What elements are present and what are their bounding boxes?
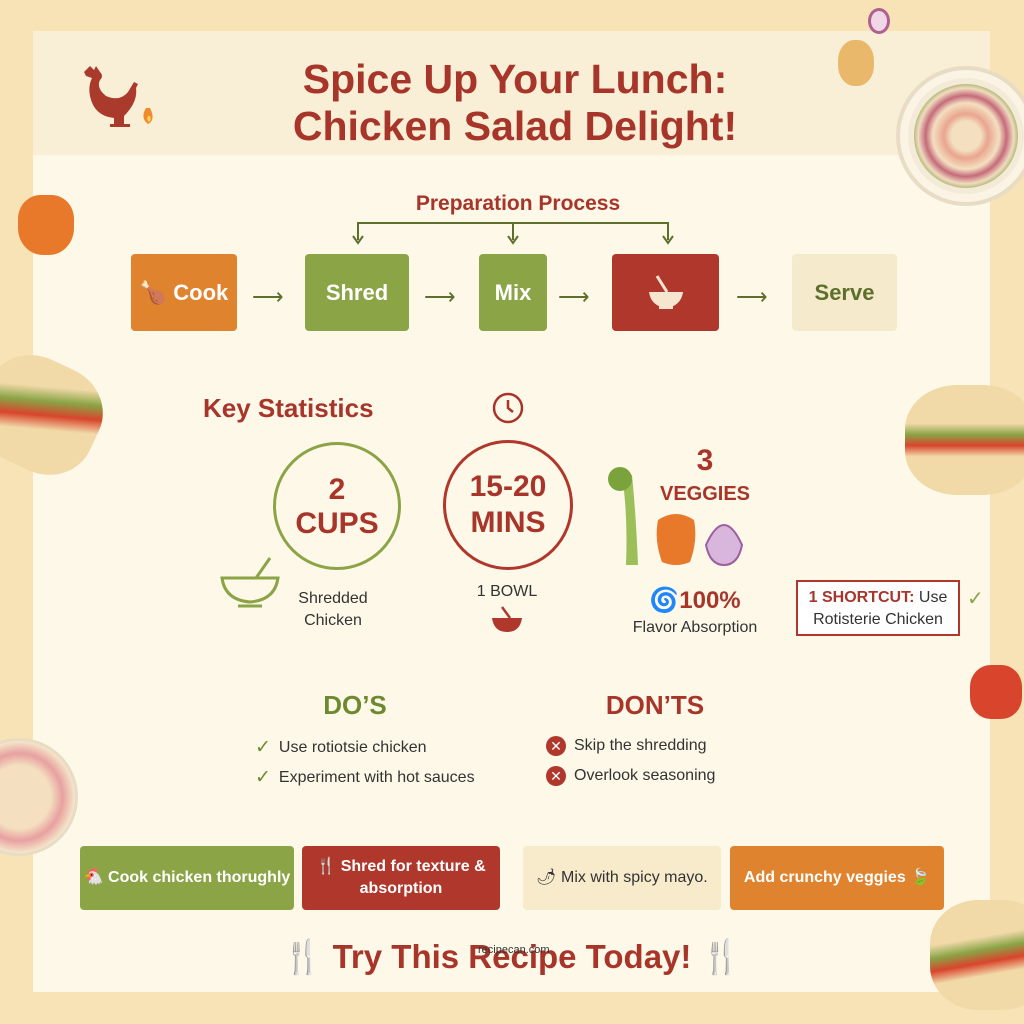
stat: 15-20 mins: 15-20 xyxy=(470,470,546,503)
step: serve: Serve xyxy=(815,280,874,304)
stat: 3 veggies xyxy=(660,444,750,505)
callout: shortcut: Rotisterie Chicken xyxy=(813,611,943,628)
arrow: ⟶ xyxy=(424,284,456,309)
card: shred: 🍴 Shred for texture & xyxy=(316,858,486,875)
label: shredded chicken: Chicken xyxy=(304,612,362,629)
list: do's: ✓ xyxy=(255,767,271,788)
icon: green bowl xyxy=(220,557,280,608)
label: 1 bowl: 1 BOWL xyxy=(477,583,537,600)
arrow: ⟶ xyxy=(736,284,768,309)
stat: 2 cups xyxy=(273,442,401,570)
bracket arrows xyxy=(352,222,674,245)
title xyxy=(293,56,737,149)
card: shred xyxy=(302,846,500,910)
stat: 100% flavor absorption xyxy=(633,586,757,636)
icon: check: ✓ xyxy=(967,588,984,610)
decoration: sandwich left xyxy=(0,340,118,490)
title: Chicken Salad Delight! xyxy=(293,103,737,149)
card: veggies: Add crunchy veggies 🍃 xyxy=(744,869,930,886)
icon: veggies xyxy=(608,467,743,566)
list: do's: Experiment with hot sauces xyxy=(279,768,475,786)
stat: 2 cups: CUPS xyxy=(295,507,379,540)
list: do's: ✓ xyxy=(255,737,271,758)
list: do's: Use rotiotsie chicken xyxy=(279,738,427,756)
header band xyxy=(33,31,990,155)
heading: key statistics: Key Statistics xyxy=(203,393,374,423)
step: cook xyxy=(131,254,237,331)
heading: do's: DO’S xyxy=(323,690,387,720)
stat: 100% flavor absorption: Flavor Absorption xyxy=(633,619,757,636)
icon: clock xyxy=(492,392,524,424)
subtitle: preparation process: Preparation Process xyxy=(416,192,620,215)
list: don'ts: Overlook seasoning xyxy=(574,767,715,784)
heading: don'ts: DON’TS xyxy=(606,690,704,720)
step: shred xyxy=(305,254,409,331)
card: shred: absorption xyxy=(360,880,442,897)
watermark: recipecan.com xyxy=(478,944,550,956)
stat: 3 veggies: 3 xyxy=(697,444,713,477)
stat: 2 cups: 2 xyxy=(329,473,345,506)
stat: 15-20 mins xyxy=(443,440,573,570)
title: Spice Up Your Lunch: xyxy=(303,56,727,102)
stat: 3 veggies: VEGGIES xyxy=(660,483,750,505)
list: don'ts xyxy=(546,736,715,786)
card: mix xyxy=(523,846,721,910)
arrow: ⟶ xyxy=(252,284,284,309)
callout: shortcut xyxy=(796,580,960,636)
decoration: sandwich bottom right xyxy=(930,900,1024,1010)
card: veggies xyxy=(730,846,944,910)
decoration: pepper left xyxy=(18,195,74,255)
icon: red bowl xyxy=(492,606,522,632)
step: mix: Mix xyxy=(495,280,531,304)
card: mix: 🌶 Mix with spicy mayo. xyxy=(536,869,708,886)
label: shredded chicken: Shredded xyxy=(298,590,368,607)
card: cook chicken: 🐔 Cook chicken thorughly xyxy=(84,869,290,886)
step: serve xyxy=(792,254,897,331)
list: don'ts: ✕ xyxy=(550,738,562,754)
step: cook: 🍗 Cook xyxy=(140,280,228,304)
stat: 15-20 mins: MINS xyxy=(470,506,546,539)
arrow: ⟶ xyxy=(558,284,590,309)
decoration: sandwich right xyxy=(905,385,1024,495)
callout: shortcut: 1 SHORTCUT: Use xyxy=(809,589,947,606)
label: shredded chicken xyxy=(298,590,368,629)
list: do's xyxy=(255,737,475,788)
list: don'ts: Skip the shredding xyxy=(574,737,707,754)
stat: 100% flavor absorption: 🌀100% xyxy=(649,587,741,614)
decoration: pepper right xyxy=(970,665,1022,719)
step: shred: Shred xyxy=(326,280,388,304)
list: don'ts: ✕ xyxy=(550,768,562,784)
step: mix xyxy=(479,254,547,331)
decoration: plate left xyxy=(0,738,78,856)
card: cook chicken xyxy=(80,846,294,910)
decoration: carrot xyxy=(838,40,874,86)
footer: call to action: 🍴 Try This Recipe Today! 🍴 xyxy=(282,938,742,975)
icon: chicken xyxy=(84,66,153,127)
step: bowl xyxy=(612,254,719,331)
decoration: plate top right xyxy=(896,66,1024,206)
